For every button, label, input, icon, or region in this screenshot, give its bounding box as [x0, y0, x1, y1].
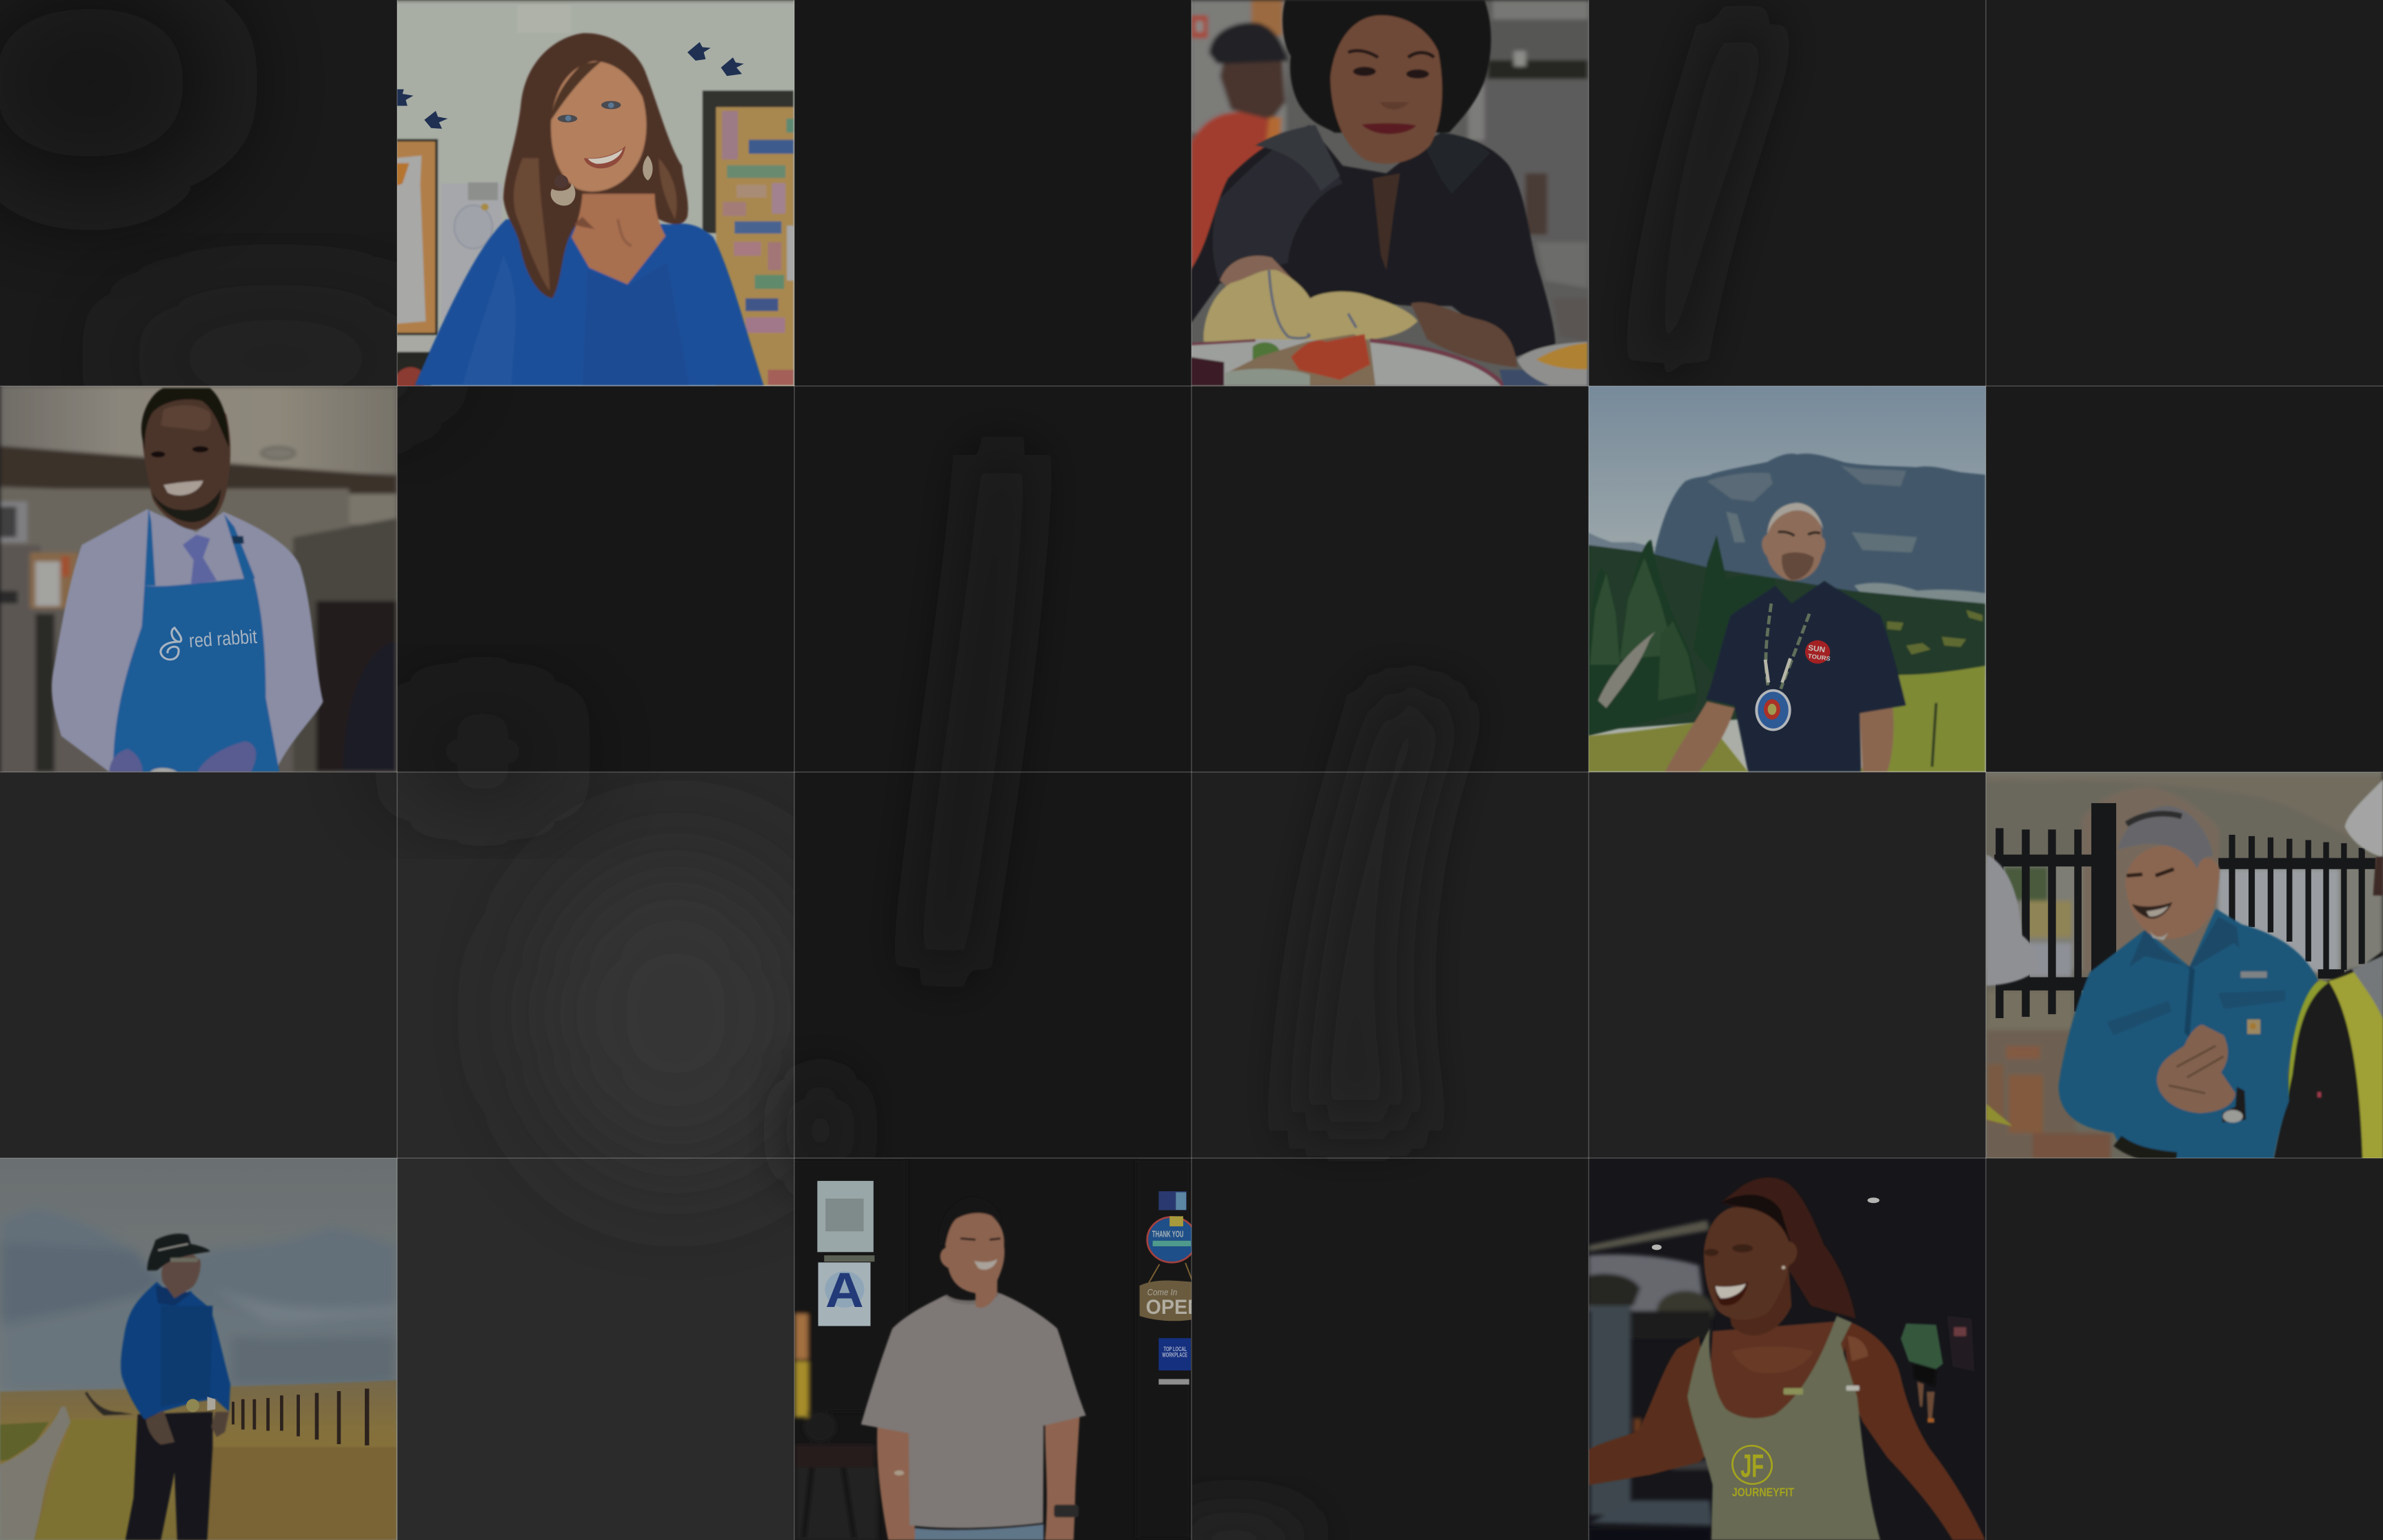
neck and chest	[572, 194, 665, 284]
red badge: SUN	[1807, 645, 1826, 654]
photo: woman serving food in kitchen	[1179, 0, 1607, 400]
rancher	[121, 1234, 230, 1540]
photo: gym owner in olive tank top	[1579, 1144, 2007, 1540]
face	[1330, 15, 1442, 163]
gravel path	[0, 1407, 70, 1540]
arms	[877, 1427, 916, 1540]
bulletin board left	[396, 139, 438, 393]
window stickers	[1140, 1191, 1202, 1385]
hair	[1283, 0, 1491, 132]
health grade notices	[817, 1181, 874, 1326]
head	[143, 394, 230, 530]
fence posts	[232, 1388, 369, 1446]
iron fence	[1994, 803, 2375, 1018]
arm	[1665, 702, 1734, 772]
apron logo: red rabbit	[188, 627, 258, 652]
runner in background	[1901, 1316, 1974, 1423]
paper on wall	[452, 182, 499, 251]
notice board right	[703, 90, 794, 385]
hair	[503, 33, 688, 298]
window stickers: OPEN	[1146, 1295, 1202, 1319]
dinosaur footprints	[396, 42, 744, 129]
JourneyFit logo: JF	[1740, 1448, 1764, 1484]
chest	[1710, 1321, 1846, 1427]
jeans	[915, 1524, 1044, 1540]
head	[2125, 845, 2220, 939]
face	[551, 61, 646, 192]
window stickers: THANK YOU	[1152, 1229, 1183, 1239]
shirt and sleeves	[1191, 125, 1556, 357]
window stickers: WORKPLACE	[1163, 1352, 1187, 1358]
blouse	[415, 219, 764, 385]
gloves	[109, 749, 143, 772]
meadow	[1587, 721, 1748, 772]
man in red in background	[1191, 112, 1283, 275]
hard hats and vest	[1987, 780, 2383, 1159]
forest	[1587, 545, 1985, 731]
photo: man in blue apron in kitchen	[0, 379, 428, 779]
photo: rancher in hat on prairie	[0, 1157, 428, 1540]
belt buckle	[186, 1397, 215, 1412]
photo: teacher in blue blouse	[397, 0, 794, 386]
hands	[2157, 1025, 2235, 1113]
grey t-shirt	[861, 1293, 1086, 1528]
head	[941, 1208, 1005, 1308]
work shirt	[2058, 909, 2318, 1159]
window stickers: Come In	[1147, 1287, 1177, 1297]
tie	[183, 535, 217, 585]
beaded necklace and medallion	[1755, 604, 1809, 731]
photo: man in blue work shirt at fence	[1972, 758, 2383, 1172]
arms and shoulders	[1589, 1336, 1716, 1485]
red badge	[1805, 640, 1831, 664]
apron straps and bib	[145, 508, 155, 586]
photo: man before mountain in meadow	[1579, 379, 2007, 779]
shirt	[52, 509, 323, 772]
window stickers: TOP LOCAL	[1164, 1346, 1187, 1352]
background: dark textured cells	[0, 454, 1429, 1540]
field	[0, 1380, 396, 1540]
apron logo	[161, 627, 258, 660]
JourneyFit logo: JOURNEYFIT	[1732, 1485, 1794, 1499]
olive tank top	[1687, 1316, 1880, 1540]
ceiling lights	[1652, 1197, 1880, 1250]
health grade notices: A	[825, 1263, 864, 1318]
photo: restaurant owner in grey tee at storefront	[779, 1144, 1207, 1540]
red badge: TOURS	[1807, 653, 1831, 662]
neck and head	[1727, 1270, 1791, 1335]
head	[1762, 504, 1825, 580]
plates and salsa	[1191, 339, 1504, 385]
mountain	[1654, 454, 1985, 606]
eyes, mouth, earrings	[551, 101, 653, 205]
hair	[1721, 1177, 1856, 1319]
hand with tortilla	[1220, 256, 1294, 306]
JourneyFit logo	[1728, 1441, 1794, 1499]
shirt	[1706, 580, 1906, 772]
